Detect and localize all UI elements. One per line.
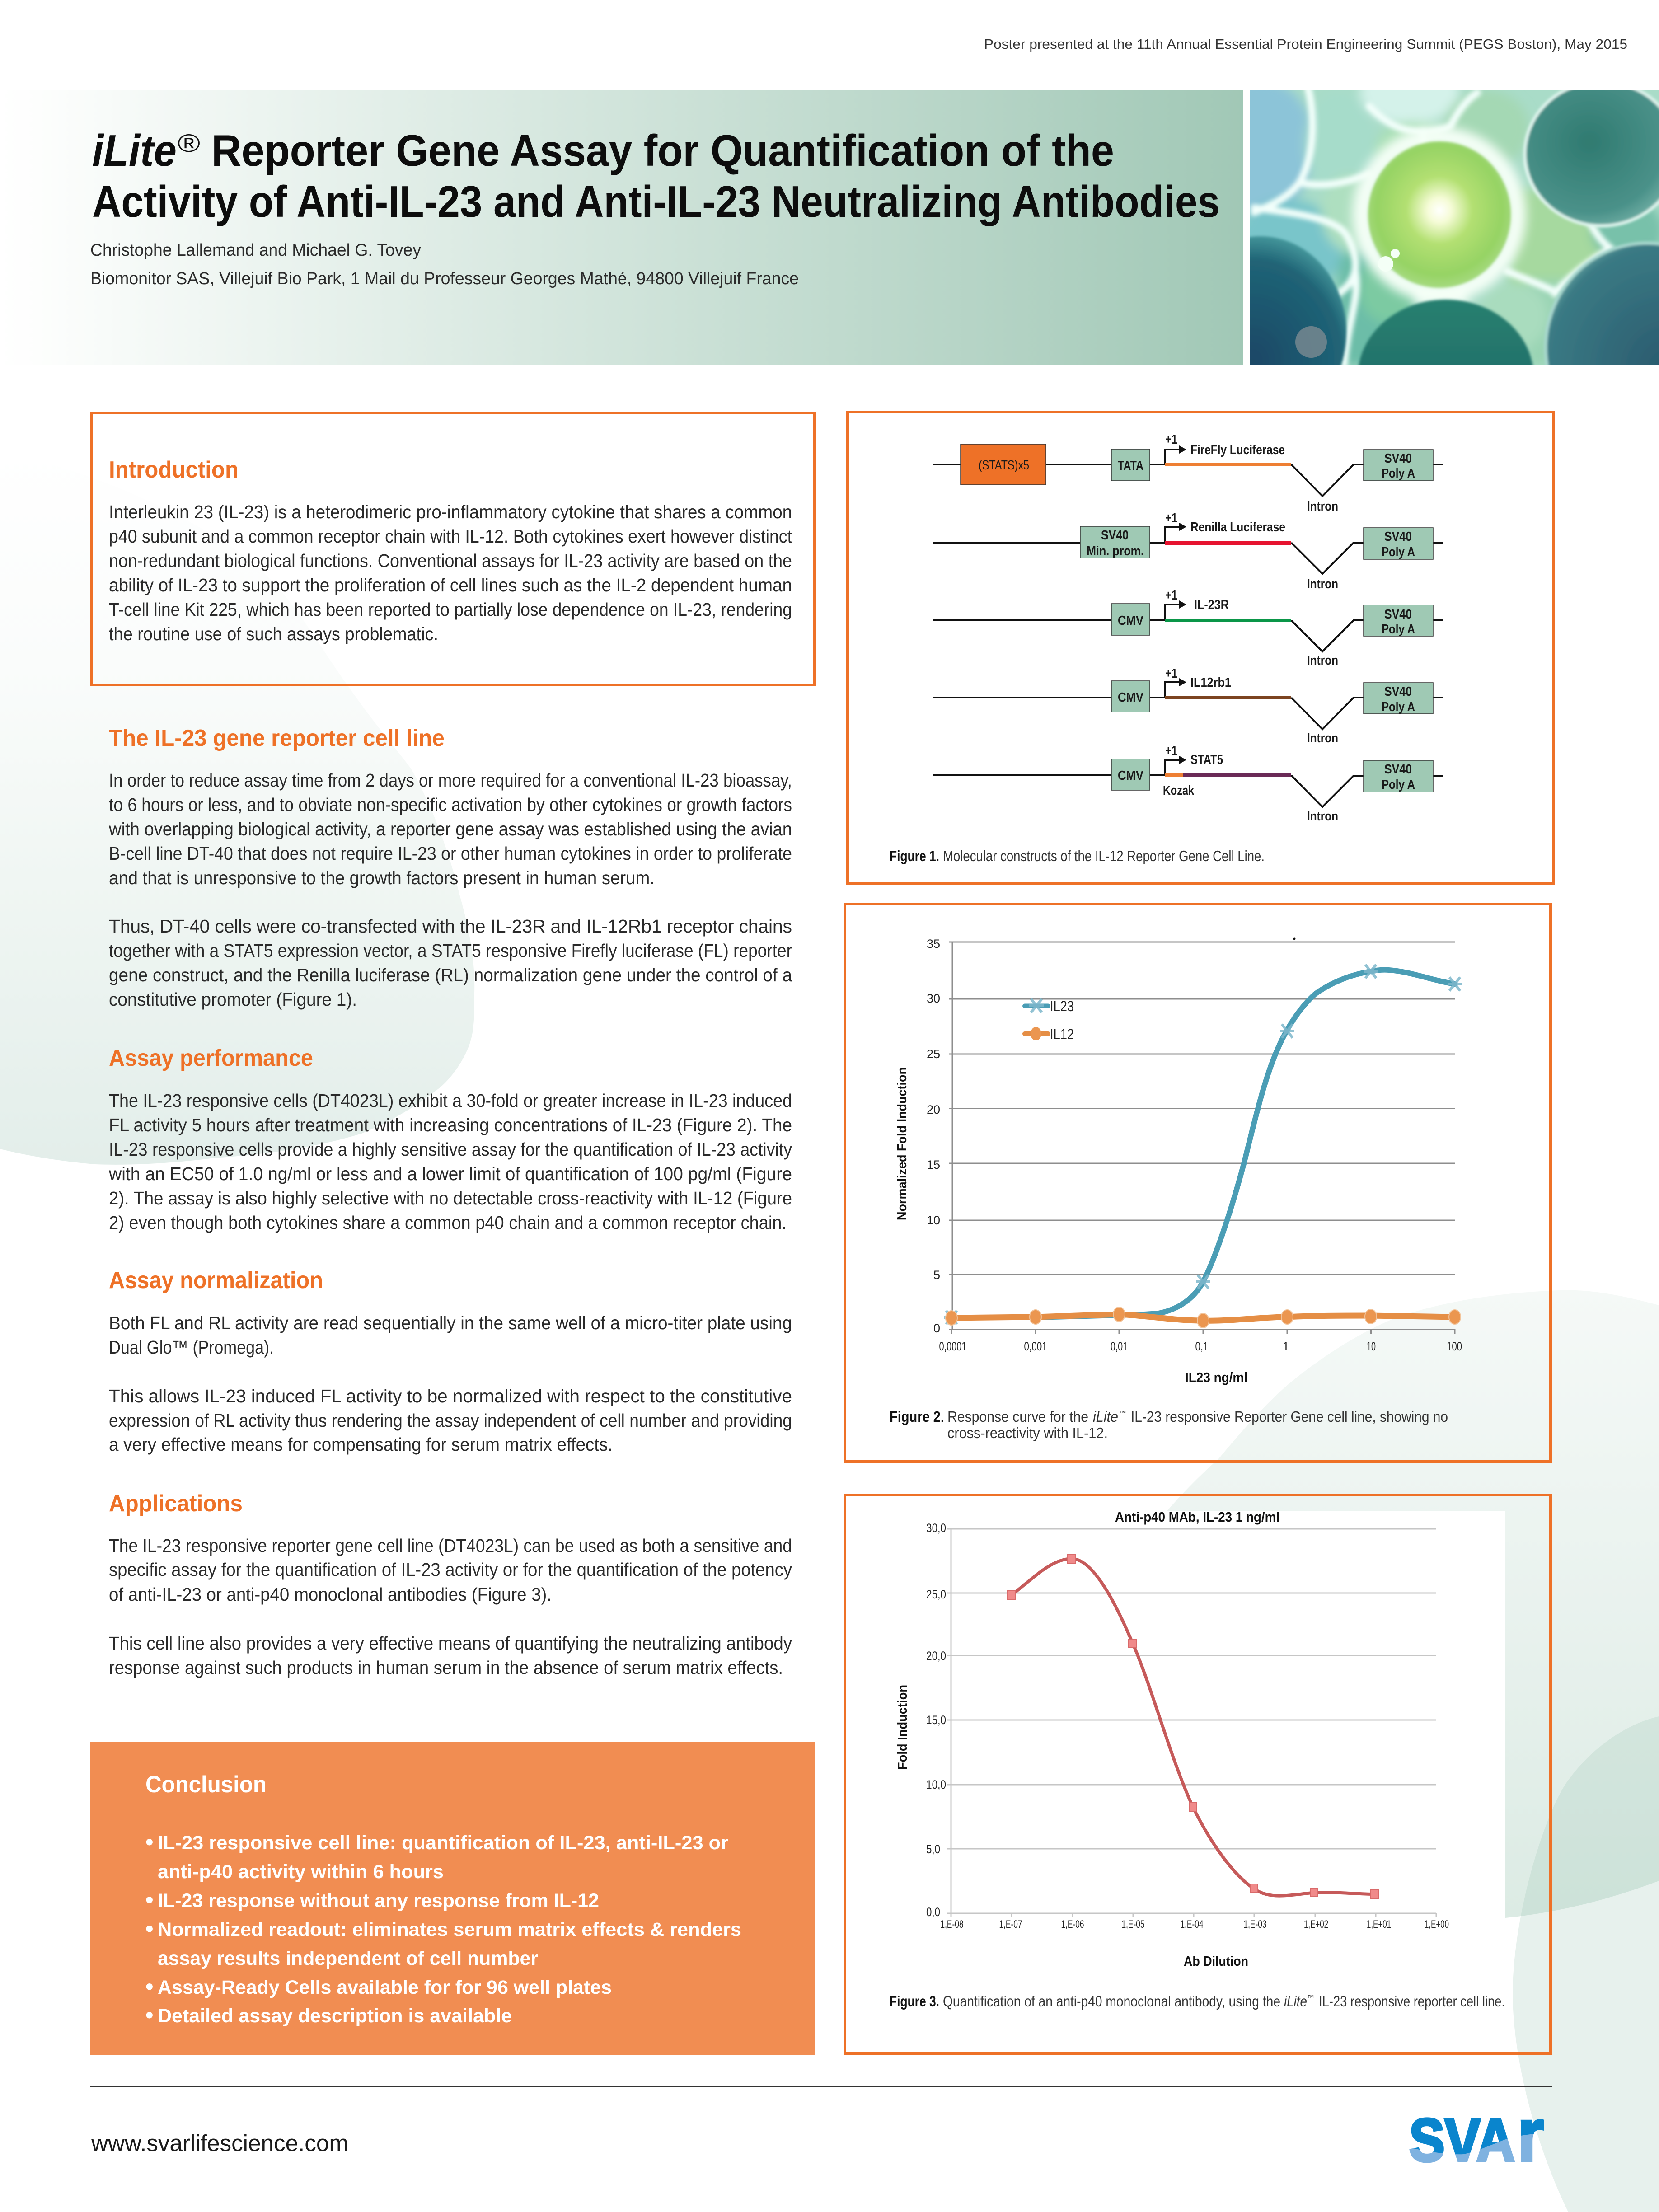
y tick labels: 5,0 — [926, 1842, 940, 1856]
construct 2: Renilla Luciferase: SV40 — [1101, 528, 1129, 543]
construct 3: IL-23R: Intron — [1307, 653, 1338, 668]
text: assay performance body — [108, 1090, 792, 1233]
text: applications paragraph 2: This cell line also provides a very effective means of quantifying the neutralizing antibody — [109, 1633, 792, 1654]
construct 5: STAT5: Intron — [1307, 809, 1338, 824]
construct 4: IL12rb1 — [933, 666, 1443, 745]
y axis grid — [949, 942, 1455, 1334]
construct 3: IL-23R: IL-23R — [1194, 598, 1229, 612]
y tick labels: 35 — [927, 937, 940, 951]
text: reporter cell line paragraph 1: to 6 hours or less, and to obviate non-specific activation by other cytokines or growth factors — [109, 794, 792, 815]
x tick labels: 1,E+00 — [1425, 1918, 1449, 1931]
construct 1: FireFly Luciferase: +1 — [1165, 432, 1177, 447]
series: IL23 — [944, 965, 1462, 1324]
construct 2: Renilla Luciferase: Intron — [1307, 577, 1338, 591]
x tick labels: 1,E-08 — [941, 1918, 963, 1931]
text: introduction body: non-redundant biological functions. Conventional assays for IL-23 activity are based on the — [109, 550, 792, 571]
background shape: left blob — [0, 452, 474, 1165]
y tick labels: 10 — [927, 1214, 940, 1227]
title: iLite — [92, 126, 177, 175]
text: reporter cell line paragraph 2 — [109, 916, 792, 1010]
bullet: cell line: • — [145, 1829, 154, 1855]
heading: Assay performance: Assay performance — [109, 1045, 313, 1071]
construct 1: FireFly Luciferase: (STATS)x5 — [979, 458, 1029, 473]
title: Activity of Anti-IL-23 and Anti-IL-23 Neutralizing Antibodies — [92, 177, 1220, 226]
caption: figure 2: iLite — [1093, 1408, 1118, 1425]
caption: figure 2: IL-23 responsive Reporter Gene cell line, showing no — [1131, 1408, 1448, 1425]
construct 3: IL-23R: Poly A — [1382, 622, 1415, 637]
text: reporter cell line paragraph 1: with overlapping biological activity, a reporter gene assay was established using the avian — [108, 819, 792, 839]
text: reporter cell line paragraph 2: constitutive promoter (Figure 1). — [109, 989, 357, 1010]
heading: Conclusion: Conclusion — [145, 1771, 267, 1798]
construct 2: Renilla Luciferase: SV40 — [1384, 530, 1412, 544]
bullet: cell line — [145, 1829, 728, 1883]
text: assay performance body: 2). The assay is also highly selective with no detectable cross-reactivity with IL-12 (Figure — [109, 1188, 792, 1209]
construct 2: Renilla Luciferase: Min. prom. — [1087, 544, 1144, 558]
icon: dark cell bottom right — [1546, 243, 1659, 453]
text: assay normalization paragraph 1: Both FL and RL activity are read sequentially in the same well of a micro-titer plate using — [109, 1312, 792, 1333]
background shape: right lower blob — [1513, 1716, 1659, 2212]
caption: figure 3: Figure 3. — [890, 1993, 939, 2010]
text: introduction body — [109, 501, 792, 644]
caption: figure 3: ™ — [1307, 1994, 1314, 2002]
text: applications paragraph 1 — [109, 1535, 792, 1605]
bullet: normalized readout: • — [145, 1916, 154, 1941]
bullet: detailed description: • — [145, 2002, 154, 2028]
caption: figure 3 — [890, 1993, 1505, 2010]
construct 5: STAT5 — [933, 744, 1443, 824]
y tick labels — [927, 937, 940, 1335]
authors: Christophe Lallemand and Michael G. Tovey — [90, 241, 421, 260]
icon: dark cell top right — [1525, 81, 1659, 226]
caption: figure 3: iLite — [1284, 1993, 1307, 2010]
construct 5: STAT5: +1 — [1165, 744, 1177, 758]
icon: lens flare — [1295, 326, 1327, 358]
bullet: assay-ready cells: Assay-Ready Cells available for for 96 well plates — [158, 1977, 612, 1998]
y tick labels: 25,0 — [926, 1588, 946, 1601]
construct 1: FireFly Luciferase: Poly A — [1382, 466, 1415, 481]
text: assay performance body: 2) even though both cytokines share a common p40 chain and a common receptor chain. — [109, 1212, 787, 1233]
construct 2: Renilla Luciferase — [933, 511, 1443, 591]
construct 1: FireFly Luciferase: SV40 — [1384, 451, 1412, 466]
x tick labels — [939, 1340, 1462, 1353]
text: reporter cell line paragraph 1: B-cell line DT-40 that does not require IL-23 or other human cytokines in order to proliferate — [109, 843, 792, 864]
text: assay performance body: The IL-23 responsive cells (DT4023L) exhibit a 30-fold or greater increase in IL-23 induced — [109, 1090, 792, 1111]
bullet: cell line: anti-p40 activity within 6 hours — [158, 1861, 444, 1883]
construct 4: IL12rb1: +1 — [1165, 666, 1177, 681]
chart background — [846, 1511, 1505, 1990]
legend: IL12 — [1050, 1026, 1074, 1042]
text: applications paragraph 1: specific assay for the quantification of IL-23 activity or for the quantification of the potency — [109, 1559, 792, 1580]
conference note: Poster presented at the 11th Annual Essential Protein Engineering Summit (PEGS Boston), May 2015 — [984, 36, 1627, 52]
construct 2: Renilla Luciferase: Poly A — [1382, 545, 1415, 559]
caption: figure 2: ™ — [1119, 1410, 1126, 1417]
x tick labels: 0,0001 — [939, 1340, 967, 1353]
construct 1: FireFly Luciferase: Intron — [1307, 499, 1338, 514]
text: applications paragraph 1: of anti-IL-23 or anti-p40 monoclonal antibodies (Figure 3). — [109, 1584, 552, 1605]
y tick labels: 10,0 — [926, 1778, 946, 1791]
x tick labels — [941, 1918, 1449, 1931]
text: introduction body: T-cell line Kit 225, which has been reported to partially lose dependence on IL-23, rendering — [109, 599, 792, 620]
panel: figure 1 molecular constructs — [848, 412, 1553, 884]
line chart: IL-23 and IL-12 response — [895, 937, 1462, 1385]
background shape: right upper blob — [1129, 1290, 1659, 1918]
bullet: assay-ready cells: • — [145, 1974, 154, 1999]
x tick labels: 1,E-06 — [1061, 1918, 1084, 1931]
x axis title: IL23 ng/ml — [1185, 1369, 1247, 1385]
footer rule — [90, 2086, 1552, 2087]
icon: dark cell bottom centre — [1358, 300, 1534, 455]
line chart: anti-p40 MAb — [895, 1509, 1449, 1969]
construct 3: IL-23R: +1 — [1165, 588, 1177, 603]
text: reporter cell line paragraph 1: In order to reduce assay time from 2 days or more required for a conventional IL-23 bioassay, — [109, 770, 792, 791]
bullet: cell line: IL-23 responsive cell line: quantification of IL-23, anti-IL-23 or — [158, 1832, 728, 1854]
construct 5: STAT5: Kozak — [1163, 783, 1195, 798]
text: assay normalization paragraph 2: This allows IL-23 induced FL activity to be normalized with respect to the constitutive — [109, 1386, 792, 1406]
series: fold induction — [1008, 1555, 1378, 1898]
logo: SVAr: r — [1517, 2092, 1544, 2177]
text: assay normalization paragraph 1: Dual Glo™ (Promega). — [109, 1337, 274, 1358]
text: assay performance body: FL activity 5 hours after treatment with increasing concentrations of IL-23 (Figure 2). The — [109, 1115, 792, 1135]
bullet: normalized readout — [145, 1916, 741, 1969]
caption: figure 2: cross-reactivity with IL-12. — [947, 1425, 1108, 1441]
construct 1: FireFly Luciferase: TATA — [1118, 459, 1143, 473]
title: Reporter Gene Assay for Quantification of the — [211, 126, 1114, 175]
icon: dark cell bottom left — [1175, 236, 1346, 428]
x tick labels: 1,E-04 — [1180, 1918, 1204, 1931]
panel: figure 3 anti-p40 curve — [845, 1495, 1551, 2053]
text: applications paragraph 2 — [109, 1633, 792, 1678]
construct 3: IL-23R: CMV — [1118, 614, 1144, 628]
construct 4: IL12rb1: IL12rb1 — [1190, 675, 1231, 690]
header band — [0, 90, 1243, 365]
construct 4: IL12rb1: SV40 — [1384, 684, 1412, 699]
y tick labels: 25 — [927, 1047, 940, 1061]
text: introduction body: p40 subunit and a common receptor chain with IL-12. Both cytokines exert however distinct — [109, 526, 792, 547]
construct 4: IL12rb1: Intron — [1307, 731, 1338, 745]
title — [92, 126, 1220, 226]
x tick labels: 1,E+01 — [1367, 1918, 1391, 1931]
y tick labels: 0 — [933, 1322, 940, 1335]
heading: The IL-23 gene reporter cell line: The IL-23 gene reporter cell line — [109, 725, 445, 751]
text: introduction body: the routine use of such assays problematic. — [109, 623, 438, 644]
x tick labels: 1,E-05 — [1121, 1918, 1145, 1931]
icon: white vesicles — [1378, 249, 1400, 272]
header image: cells — [1250, 90, 1659, 365]
text: applications paragraph 2: response against such products in human serum in the absence of serum matrix effects. — [109, 1657, 783, 1678]
construct 5: STAT5: CMV — [1118, 769, 1144, 783]
y axis title: Fold Induction — [895, 1685, 910, 1770]
caption: figure 3: IL-23 responsive reporter cell line. — [1319, 1993, 1505, 2010]
bullet: normalized readout: assay results independent of cell number — [158, 1948, 538, 1969]
x tick labels: 10 — [1367, 1340, 1376, 1353]
text: assay performance body: with an EC50 of 1.0 ng/ml or less and a lower limit of quantification of 100 pg/ml (Figure — [108, 1163, 792, 1184]
text: reporter cell line paragraph 1 — [108, 770, 792, 888]
bullet: IL-23 response: IL-23 response without any response from IL-12 — [158, 1890, 599, 1912]
heading: Introduction: Introduction — [109, 457, 239, 483]
y tick labels: 20 — [927, 1103, 940, 1116]
legend: IL23 — [1050, 998, 1074, 1014]
y tick labels: 30 — [927, 992, 940, 1005]
grid and axes — [947, 1529, 1436, 1917]
construct 4: IL12rb1: CMV — [1118, 690, 1144, 705]
construct 3: IL-23R — [933, 588, 1443, 668]
caption: figure 2: Response curve for the — [947, 1408, 1088, 1425]
construct 4: IL12rb1: Poly A — [1382, 700, 1415, 714]
caption: figure 1: Molecular constructs of the IL-12 Reporter Gene Cell Line. — [943, 848, 1265, 864]
y tick labels: 5 — [933, 1268, 940, 1282]
text: assay performance body: IL-23 responsive cells provide a highly sensitive assay for the quantification of IL-23 activity — [109, 1139, 792, 1160]
x tick labels: 0,01 — [1111, 1340, 1128, 1353]
text: assay normalization paragraph 2: a very effective means for compensating for serum matrix effects. — [109, 1434, 613, 1455]
text: reporter cell line paragraph 1: and that is unresponsive to the growth factors present in human serum. — [109, 867, 655, 888]
bullet: detailed description: Detailed assay description is available — [158, 2005, 512, 2027]
x tick labels: 1 — [1282, 1340, 1289, 1353]
y tick labels: 30,0 — [926, 1521, 946, 1535]
caption: figure 2 — [890, 1408, 1448, 1441]
construct 5: STAT5: STAT5 — [1190, 753, 1223, 767]
y tick labels: 0,0 — [926, 1905, 940, 1919]
text: reporter cell line paragraph 2: Thus, DT-40 cells were co-transfected with the IL-23R and IL-12Rb1 receptor chains — [109, 916, 792, 937]
x tick labels: 0,1 — [1195, 1340, 1208, 1353]
text: applications paragraph 1: The IL-23 responsive reporter gene cell line (DT4023L) can be used as both a sensitive and — [109, 1535, 792, 1556]
heading: Assay normalization: Assay normalization — [109, 1267, 323, 1293]
x tick labels: 1,E-03 — [1243, 1918, 1267, 1931]
text: assay normalization paragraph 1 — [109, 1312, 792, 1358]
y tick labels: 20,0 — [926, 1649, 946, 1663]
panel: conclusion — [90, 1742, 815, 2055]
construct 1: FireFly Luciferase: FireFly Luciferase — [1190, 443, 1285, 457]
construct 1: FireFly Luciferase — [933, 432, 1443, 514]
caption: figure 2: Figure 2. — [890, 1408, 944, 1425]
x tick labels: 100 — [1447, 1340, 1462, 1353]
affiliation: Biomonitor SAS, Villejuif Bio Park, 1 Mail du Professeur Georges Mathé, 94800 Villejuif France — [90, 269, 799, 288]
heading: Applications: Applications — [109, 1490, 243, 1517]
website: www.svarlifescience.com — [91, 2130, 348, 2156]
series: IL12 — [946, 1307, 1461, 1328]
bullet: IL-23 response: • — [145, 1887, 154, 1912]
x axis title: Ab Dilution — [1184, 1953, 1248, 1969]
caption: figure 3: Quantification of an anti-p40 monoclonal antibody, using the — [943, 1993, 1280, 2010]
title: ® — [178, 129, 200, 157]
caption: figure 1: Figure 1. — [890, 848, 939, 864]
icon: central green cell — [1368, 141, 1511, 288]
x tick labels: 1,E-07 — [999, 1918, 1022, 1931]
x tick labels: 1,E+02 — [1304, 1918, 1328, 1931]
legend — [1025, 998, 1074, 1042]
y tick labels — [926, 1521, 946, 1919]
text: reporter cell line paragraph 2: gene construct, and the Renilla luciferase (RL) normalization gene under the control of a — [109, 965, 792, 985]
panel: introduction — [92, 413, 815, 685]
bullet: normalized readout: Normalized readout: eliminates serum matrix effects & renders — [158, 1919, 741, 1940]
construct 2: Renilla Luciferase: +1 — [1165, 511, 1177, 525]
stray mark — [1293, 938, 1296, 940]
y tick labels: 15 — [927, 1158, 940, 1172]
panel: figure 2 response curve — [845, 904, 1551, 1462]
text: reporter cell line paragraph 2: together with a STAT5 expression vector, a STAT5 responsive Firefly luciferase (FL) reporter — [109, 940, 792, 961]
text: assay normalization paragraph 2 — [109, 1386, 792, 1455]
y axis title: Normalized Fold Induction — [895, 1067, 909, 1220]
text: assay normalization paragraph 2: expression of RL activity thus rendering the assay independent of cell number and providing — [109, 1410, 792, 1431]
construct 5: STAT5: SV40 — [1384, 762, 1412, 777]
construct 3: IL-23R: SV40 — [1384, 607, 1412, 622]
x tick labels: 0,001 — [1024, 1340, 1047, 1353]
text: introduction body: Interleukin 23 (IL-23) is a heterodimeric pro-inflammatory cytokine that shares a common — [109, 501, 792, 522]
construct 2: Renilla Luciferase: Renilla Luciferase — [1190, 520, 1285, 534]
chart title: Anti-p40 MAb, IL-23 1 ng/ml — [1115, 1509, 1279, 1525]
text: introduction body: ability of IL-23 to support the proliferation of cell lines such as the IL-2 dependent human — [109, 575, 792, 595]
cell membranes — [1254, 88, 1611, 365]
y tick labels: 15,0 — [926, 1713, 946, 1727]
construct 5: STAT5: Poly A — [1382, 778, 1415, 792]
logo: SVAr: SVA — [1409, 2107, 1515, 2174]
